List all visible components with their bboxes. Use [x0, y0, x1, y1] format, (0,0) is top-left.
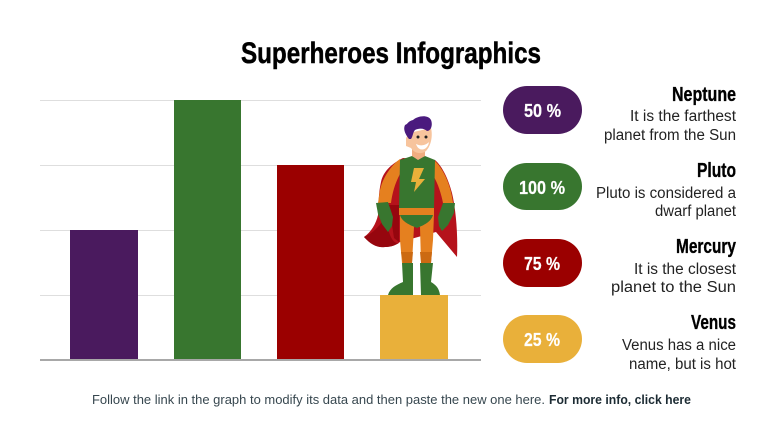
chart baseline	[40, 359, 481, 361]
cape	[364, 158, 457, 257]
arms	[378, 159, 400, 203]
footer note: For more info, click here	[549, 392, 691, 407]
boots	[388, 263, 413, 295]
pill: 75 %: 75 %	[524, 253, 560, 274]
description: Mercury: It is the closest	[634, 261, 737, 278]
bar: Pluto 100%	[174, 100, 241, 360]
stat row: Venus	[503, 312, 737, 373]
stat row: Mercury	[503, 236, 737, 296]
bar: Venus 25%	[380, 295, 448, 360]
pill: 25 %	[503, 315, 582, 363]
pill: 100 %: 100 %	[519, 177, 565, 198]
stat row: Pluto	[503, 160, 737, 220]
shorts	[400, 215, 433, 228]
pill: 25 %: 25 %	[524, 329, 560, 350]
gloves	[376, 202, 393, 232]
label: Pluto: Pluto	[697, 160, 736, 182]
description: Venus: name, but is hot	[629, 356, 737, 373]
neck and head	[412, 146, 425, 160]
legs	[400, 214, 434, 263]
pill: 100 %	[503, 163, 582, 210]
description: Mercury: planet to the Sun	[611, 279, 736, 296]
description: Mercury	[611, 261, 737, 296]
description: Neptune	[604, 108, 737, 144]
description: Venus	[622, 337, 737, 373]
belt	[399, 208, 434, 215]
label: Neptune: Neptune	[672, 84, 736, 106]
lightning emblem	[411, 168, 425, 192]
footer note: Follow the link in the graph to modify its data and then paste the new one here.	[92, 392, 545, 407]
pill: 75 %	[503, 239, 582, 287]
description: Pluto: Pluto is considered a	[596, 185, 736, 202]
pill: 50 %	[503, 86, 582, 134]
description: Pluto	[596, 185, 737, 220]
description: Pluto: dwarf planet	[655, 203, 737, 220]
icon: superhero character	[364, 116, 457, 295]
stat row: Neptune	[503, 84, 737, 144]
bar chart	[40, 100, 481, 361]
smile	[416, 142, 429, 150]
description: Neptune: planet from the Sun	[604, 127, 736, 144]
description: Neptune: It is the farthest	[630, 108, 737, 125]
bar: Mercury 75%	[277, 165, 344, 360]
label: Venus: Venus	[691, 312, 736, 334]
label: Mercury: Mercury	[676, 236, 737, 258]
pill: 50 %: 50 %	[524, 100, 561, 121]
torso	[399, 156, 435, 209]
description: Venus: Venus has a nice	[622, 337, 736, 354]
bar: Neptune 50%	[70, 230, 138, 360]
hair	[404, 116, 432, 139]
title: Superheroes Infographics	[241, 37, 541, 70]
